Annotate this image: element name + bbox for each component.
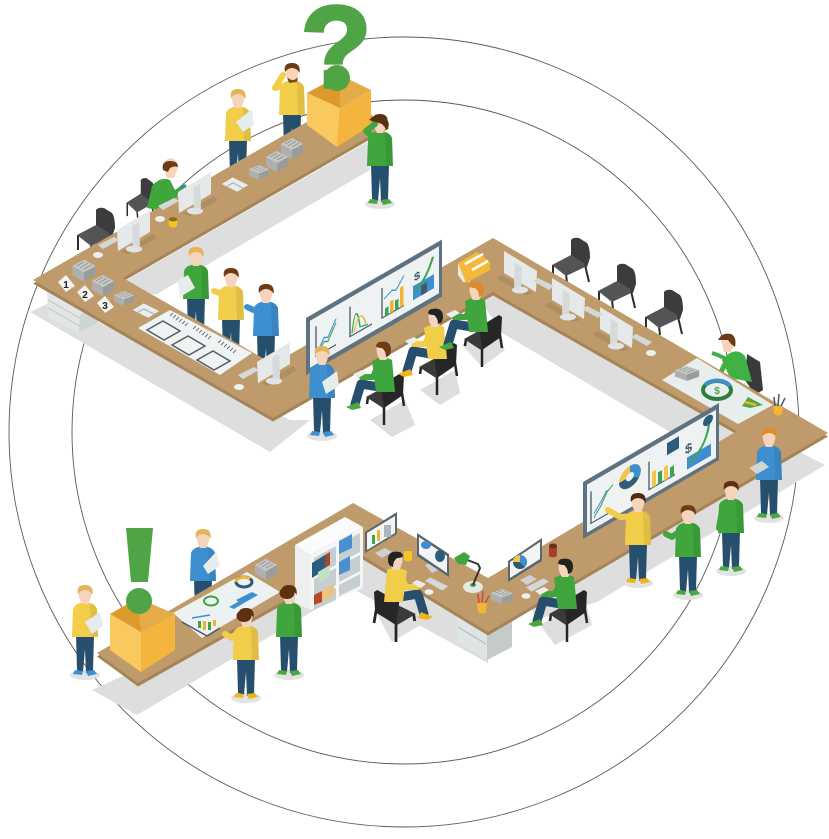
- plate with three blueprints: [138, 310, 252, 375]
- chair: empty top left: [77, 208, 115, 253]
- monitors on top desk: [93, 172, 297, 390]
- icon: exclamation mark: [126, 528, 153, 619]
- icon: yellow cup: [168, 217, 178, 228]
- chart: lines: [591, 479, 613, 523]
- box of orange folders: [458, 252, 490, 283]
- person: blue with tablet: [749, 428, 784, 523]
- person and chair: yellow seated lower: [374, 552, 433, 642]
- bookshelf: [295, 517, 363, 610]
- icon: yellow cup lower: [404, 551, 412, 562]
- chart: humps: [350, 294, 372, 337]
- question box: [307, 75, 371, 147]
- person: green right: [716, 481, 746, 576]
- person: seated green at right desk: [712, 334, 763, 395]
- icon: red cup: [549, 544, 557, 558]
- person: yellow front lower: [225, 608, 261, 703]
- icon: pencil cup right: [773, 394, 785, 416]
- exclamation box: [110, 598, 175, 672]
- front monitors: [365, 512, 549, 592]
- chart: bars: [382, 275, 404, 318]
- drawer unit: bottom: [457, 610, 512, 660]
- inner circle: [72, 100, 736, 764]
- person: blue with paper, front: [307, 346, 339, 441]
- person: seated green at top desk: [126, 158, 186, 219]
- desk top: [33, 100, 828, 683]
- icon: pencil cup lower: [477, 591, 489, 614]
- paper stack near lamp: [491, 589, 513, 604]
- person: blond yellow with paper: [223, 89, 254, 184]
- person: pointing yellow at board: [608, 493, 653, 588]
- person: yellow with hand on head: [275, 63, 307, 158]
- icon: desk lamp: [454, 552, 483, 593]
- person: yellow with paper far left: [70, 585, 103, 680]
- chart: dollar arrow: $: [414, 268, 420, 284]
- person: green near question box: [365, 114, 395, 209]
- plate with donut chart: [662, 358, 773, 424]
- person: green near board: [666, 505, 703, 600]
- board: right with charts: [583, 403, 719, 539]
- chart: zigzag lines: [316, 315, 336, 356]
- number tags: [58, 275, 114, 313]
- plate with donut chart: $: [714, 386, 720, 397]
- desk edge: [33, 104, 828, 686]
- chairs and seated people at centre: [346, 282, 502, 425]
- number tags: 2: [82, 290, 88, 301]
- drawer unit: top left: [47, 288, 98, 333]
- mouse set lower: [424, 589, 530, 599]
- monitor with pie: [508, 538, 542, 585]
- person: blue discussing: [247, 284, 281, 379]
- icon: exclamation mark: !: [136, 597, 142, 619]
- person: green front lower: [274, 585, 304, 680]
- chairs: three empty along right desk: [552, 238, 683, 335]
- monitor with charts: [417, 533, 449, 577]
- person: blue behind lower desk with paper: [188, 529, 220, 624]
- paper stacks on top desk: [72, 138, 303, 318]
- desk floor shadows: [30, 142, 825, 715]
- chart: bars: [649, 436, 679, 490]
- chart: pie: [619, 459, 641, 494]
- person: blond green with paper: [178, 247, 211, 342]
- person and chair: green seated lower: [528, 559, 587, 642]
- monitors on right desk: [497, 251, 656, 356]
- number tags: 3: [102, 301, 108, 312]
- number tags: 1: [63, 280, 69, 291]
- chart: dollar arrow: $: [685, 438, 692, 458]
- plate with charts lower: [173, 559, 280, 638]
- board: centre with four charts: [306, 240, 442, 375]
- monitor with bars: [365, 512, 397, 558]
- person: yellow discussing: [214, 268, 246, 363]
